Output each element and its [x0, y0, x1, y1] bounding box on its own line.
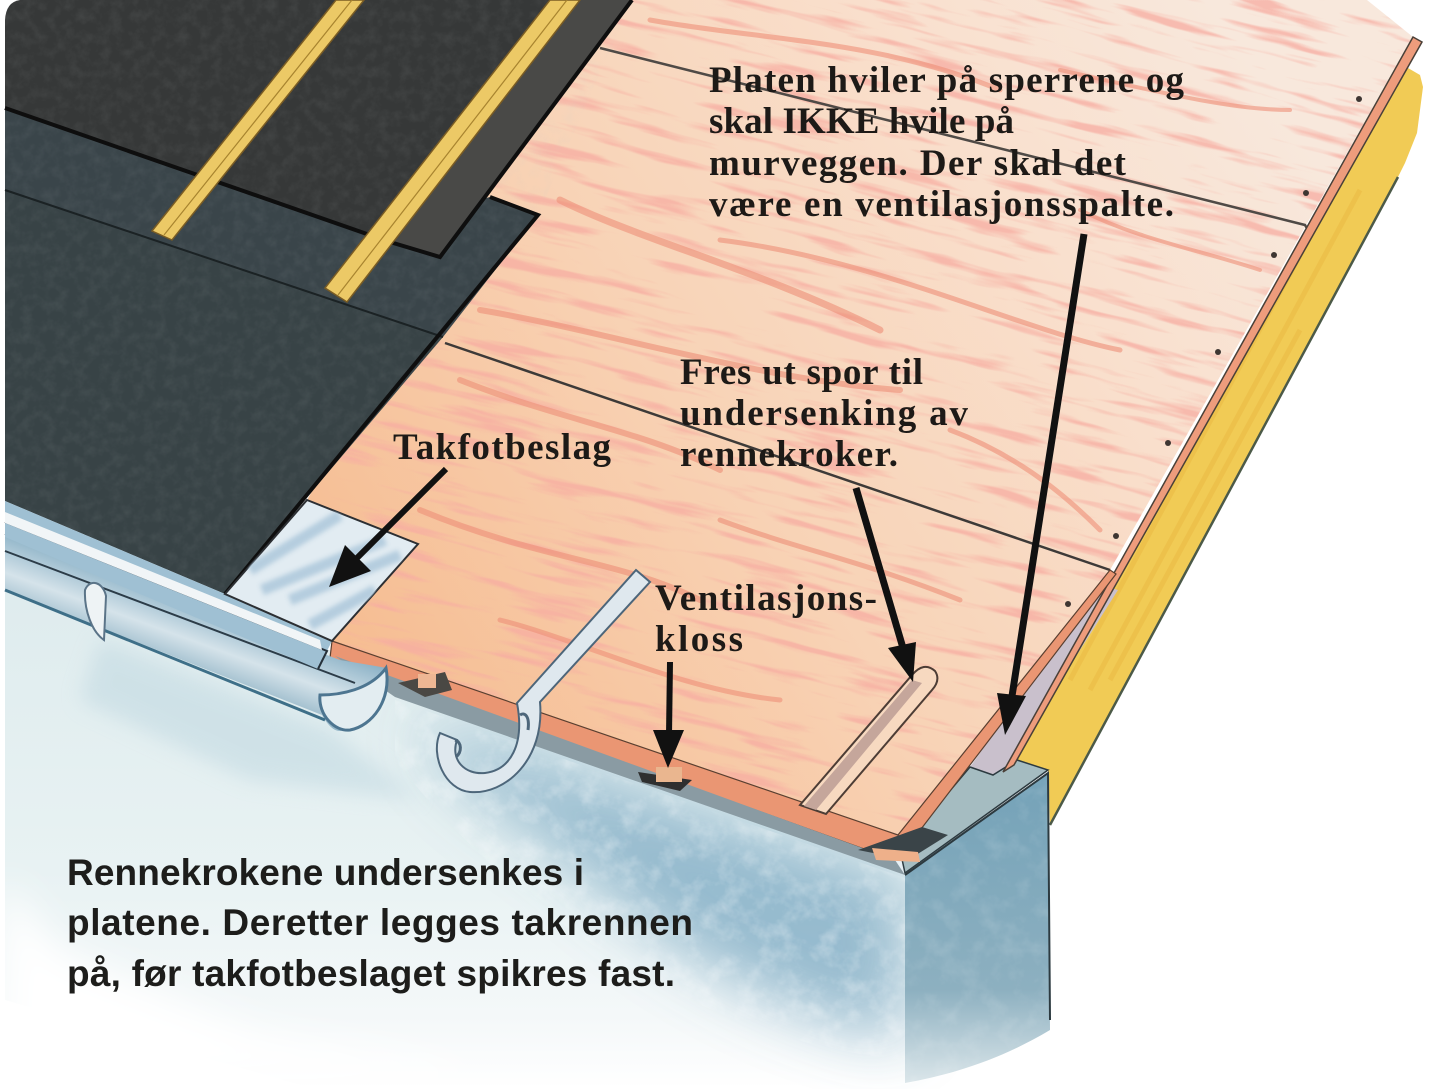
nails — [1065, 96, 1362, 607]
plate shadow strip and wall edge — [335, 656, 905, 875]
text: ventilation block label — [655, 578, 877, 660]
text: router groove: undersenking av — [680, 393, 968, 434]
ventilation gap wedge — [970, 585, 1118, 775]
arrow: to flashing — [329, 469, 446, 587]
text: router groove: Fres ut spor til — [680, 352, 923, 393]
text: bottom caption — [67, 852, 693, 994]
rafter-side orange strip — [1003, 37, 1422, 772]
arrow: to ventilation gap — [997, 234, 1084, 735]
dark roofing underlay — [5, 0, 632, 594]
arrow: to ventilation block — [653, 662, 684, 768]
wall end face — [905, 773, 1050, 1083]
text: eave flashing label: Takfotbeslag — [393, 427, 612, 468]
gutter hook — [437, 570, 650, 792]
concrete wall top at corner — [900, 760, 1048, 873]
plywood seams — [600, 48, 1312, 237]
gutter — [5, 534, 387, 731]
text: router groove: rennekroker. — [680, 434, 898, 475]
text: plate rests on rafters: murveggen. Der skal det — [709, 143, 1127, 184]
plywood front and side edge — [330, 570, 1116, 860]
eave flashing — [5, 500, 418, 669]
text: plate rests on rafters: skal IKKE hvile på — [709, 101, 1014, 142]
text: bottom caption: platene. Deretter legges takrennen — [67, 902, 693, 943]
ventilation blocks — [398, 672, 948, 862]
rafter yellow — [1017, 68, 1423, 825]
underlay: lower sheet — [5, 190, 443, 594]
routed groove — [800, 667, 937, 814]
text: plate rests on rafters: være en ventilasjonsspalte. — [709, 184, 1174, 225]
arrow: to groove — [856, 488, 916, 682]
text: bottom caption: Rennekrokene undersenkes i — [67, 852, 584, 893]
concrete wall top surface — [2, 590, 905, 1085]
underlay: upper sheet — [5, 0, 632, 257]
text: ventilation block label: Ventilasjons- — [655, 578, 877, 619]
text: plate rests on rafters: Platen hviler på sperrene og — [709, 60, 1184, 101]
gutter bracket on gutter — [85, 583, 106, 640]
text: router groove — [680, 352, 968, 475]
text: plate rests on rafters — [709, 60, 1184, 225]
text: ventilation block label: kloss — [655, 619, 743, 660]
text: bottom caption: på, før takfotbeslaget spikres fast. — [67, 953, 675, 994]
underlay: middle sheet — [5, 108, 538, 337]
battens — [152, 0, 580, 302]
